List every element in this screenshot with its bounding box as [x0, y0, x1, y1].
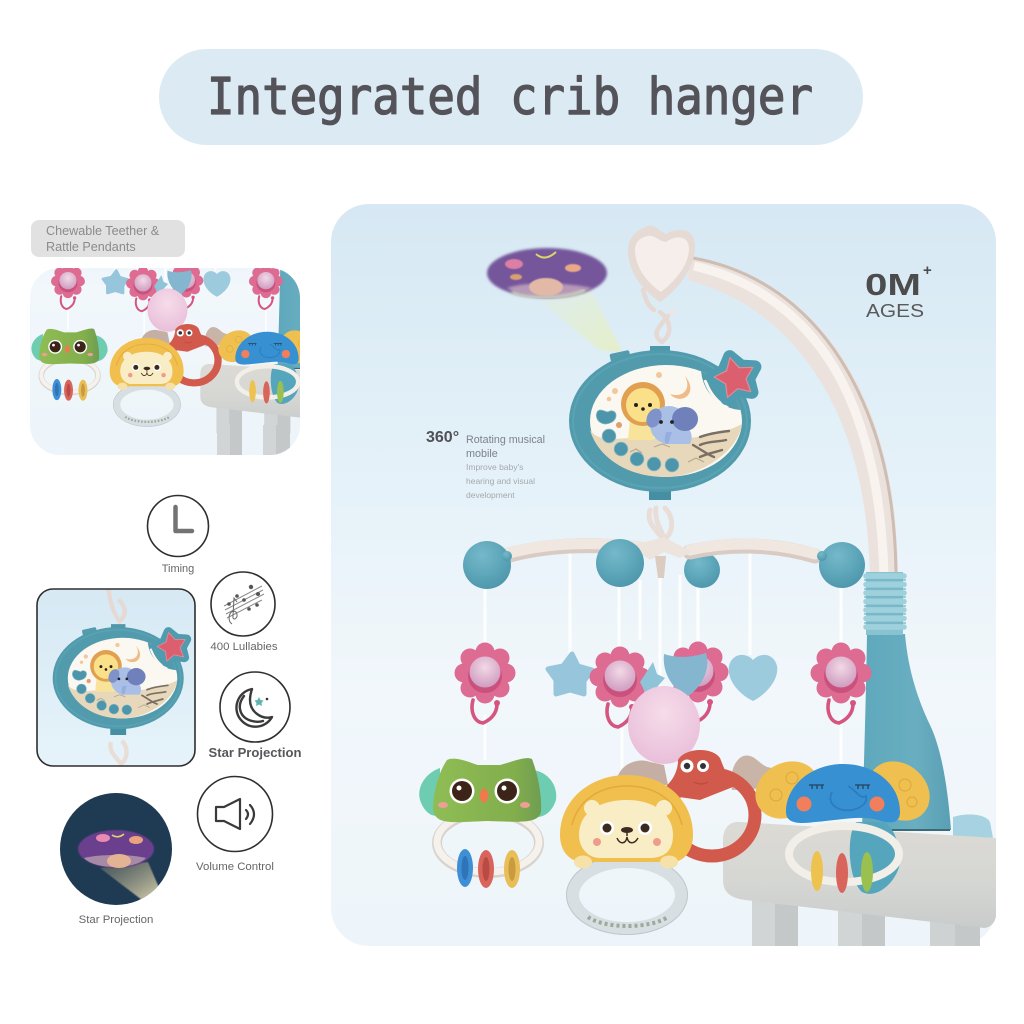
- icon: timing: [148, 496, 208, 575]
- projected star image: [487, 248, 622, 352]
- 360 rotating callout: hearing and visual: [466, 476, 535, 486]
- teal balls: [463, 539, 865, 589]
- title banner: [159, 49, 863, 145]
- chewable teether label: Rattle Pendants: [46, 240, 136, 254]
- 360 rotating callout: Rotating musical: [466, 434, 545, 446]
- wave stripes: [693, 431, 729, 457]
- 360 rotating callout: 360°: [426, 429, 459, 446]
- icon: volume control: Volume Control: [196, 861, 274, 873]
- 360 rotating callout: [426, 429, 545, 500]
- crib arm: [688, 256, 898, 575]
- lion rattle: [560, 775, 693, 934]
- panel: teether thumbnail: [30, 268, 300, 455]
- moon and stars: [607, 372, 690, 428]
- control buttons: [596, 410, 679, 472]
- heart clip: [628, 226, 695, 302]
- star button: [694, 351, 763, 413]
- teal ball behind hub: [684, 552, 720, 588]
- title text: Integrated crib hanger: [207, 68, 813, 127]
- strings: [485, 548, 841, 775]
- icon: 400 lullabies: 400 Lullabies: [210, 641, 278, 653]
- projection photo circle: [60, 793, 172, 926]
- hanging chain: [643, 290, 675, 342]
- icon: timing: Timing: [162, 563, 194, 575]
- 360 rotating callout: mobile: [466, 448, 498, 460]
- elephant: [643, 406, 698, 444]
- owl rattle: [419, 758, 556, 888]
- projection photo circle: Star Projection: [79, 914, 153, 926]
- 360 rotating callout: Improve baby's: [466, 462, 523, 472]
- chewable teether label: Chewable Teether &: [46, 224, 160, 238]
- 0M+ ages badge: +: [923, 262, 932, 279]
- musical mobile controller: [569, 326, 785, 500]
- icon: star projection moon: Star Projection: [208, 745, 302, 760]
- pink ball: [628, 686, 700, 764]
- mobile arms: [506, 537, 815, 578]
- crib rail: [723, 822, 996, 946]
- controller face: [590, 326, 785, 477]
- panel: main product image: [331, 204, 996, 946]
- 0M+ ages badge: AGES: [866, 301, 924, 321]
- crab teether: [617, 750, 773, 856]
- lower chain: [649, 508, 672, 545]
- 0M+ ages badge: 0M: [865, 267, 921, 302]
- lion face: [621, 382, 665, 440]
- icon: star projection moon: [208, 672, 302, 760]
- icon: volume control: [196, 776, 274, 873]
- hanging stars and hearts: [454, 642, 872, 727]
- 0M+ ages badge: [865, 262, 932, 321]
- chewable teether label: [31, 220, 185, 257]
- pole base: [862, 572, 993, 838]
- icon: 400 lullabies: [210, 572, 278, 653]
- panel: controller thumbnail: [37, 584, 208, 766]
- 360 rotating callout: development: [466, 490, 515, 500]
- elephant rattle: [745, 749, 942, 894]
